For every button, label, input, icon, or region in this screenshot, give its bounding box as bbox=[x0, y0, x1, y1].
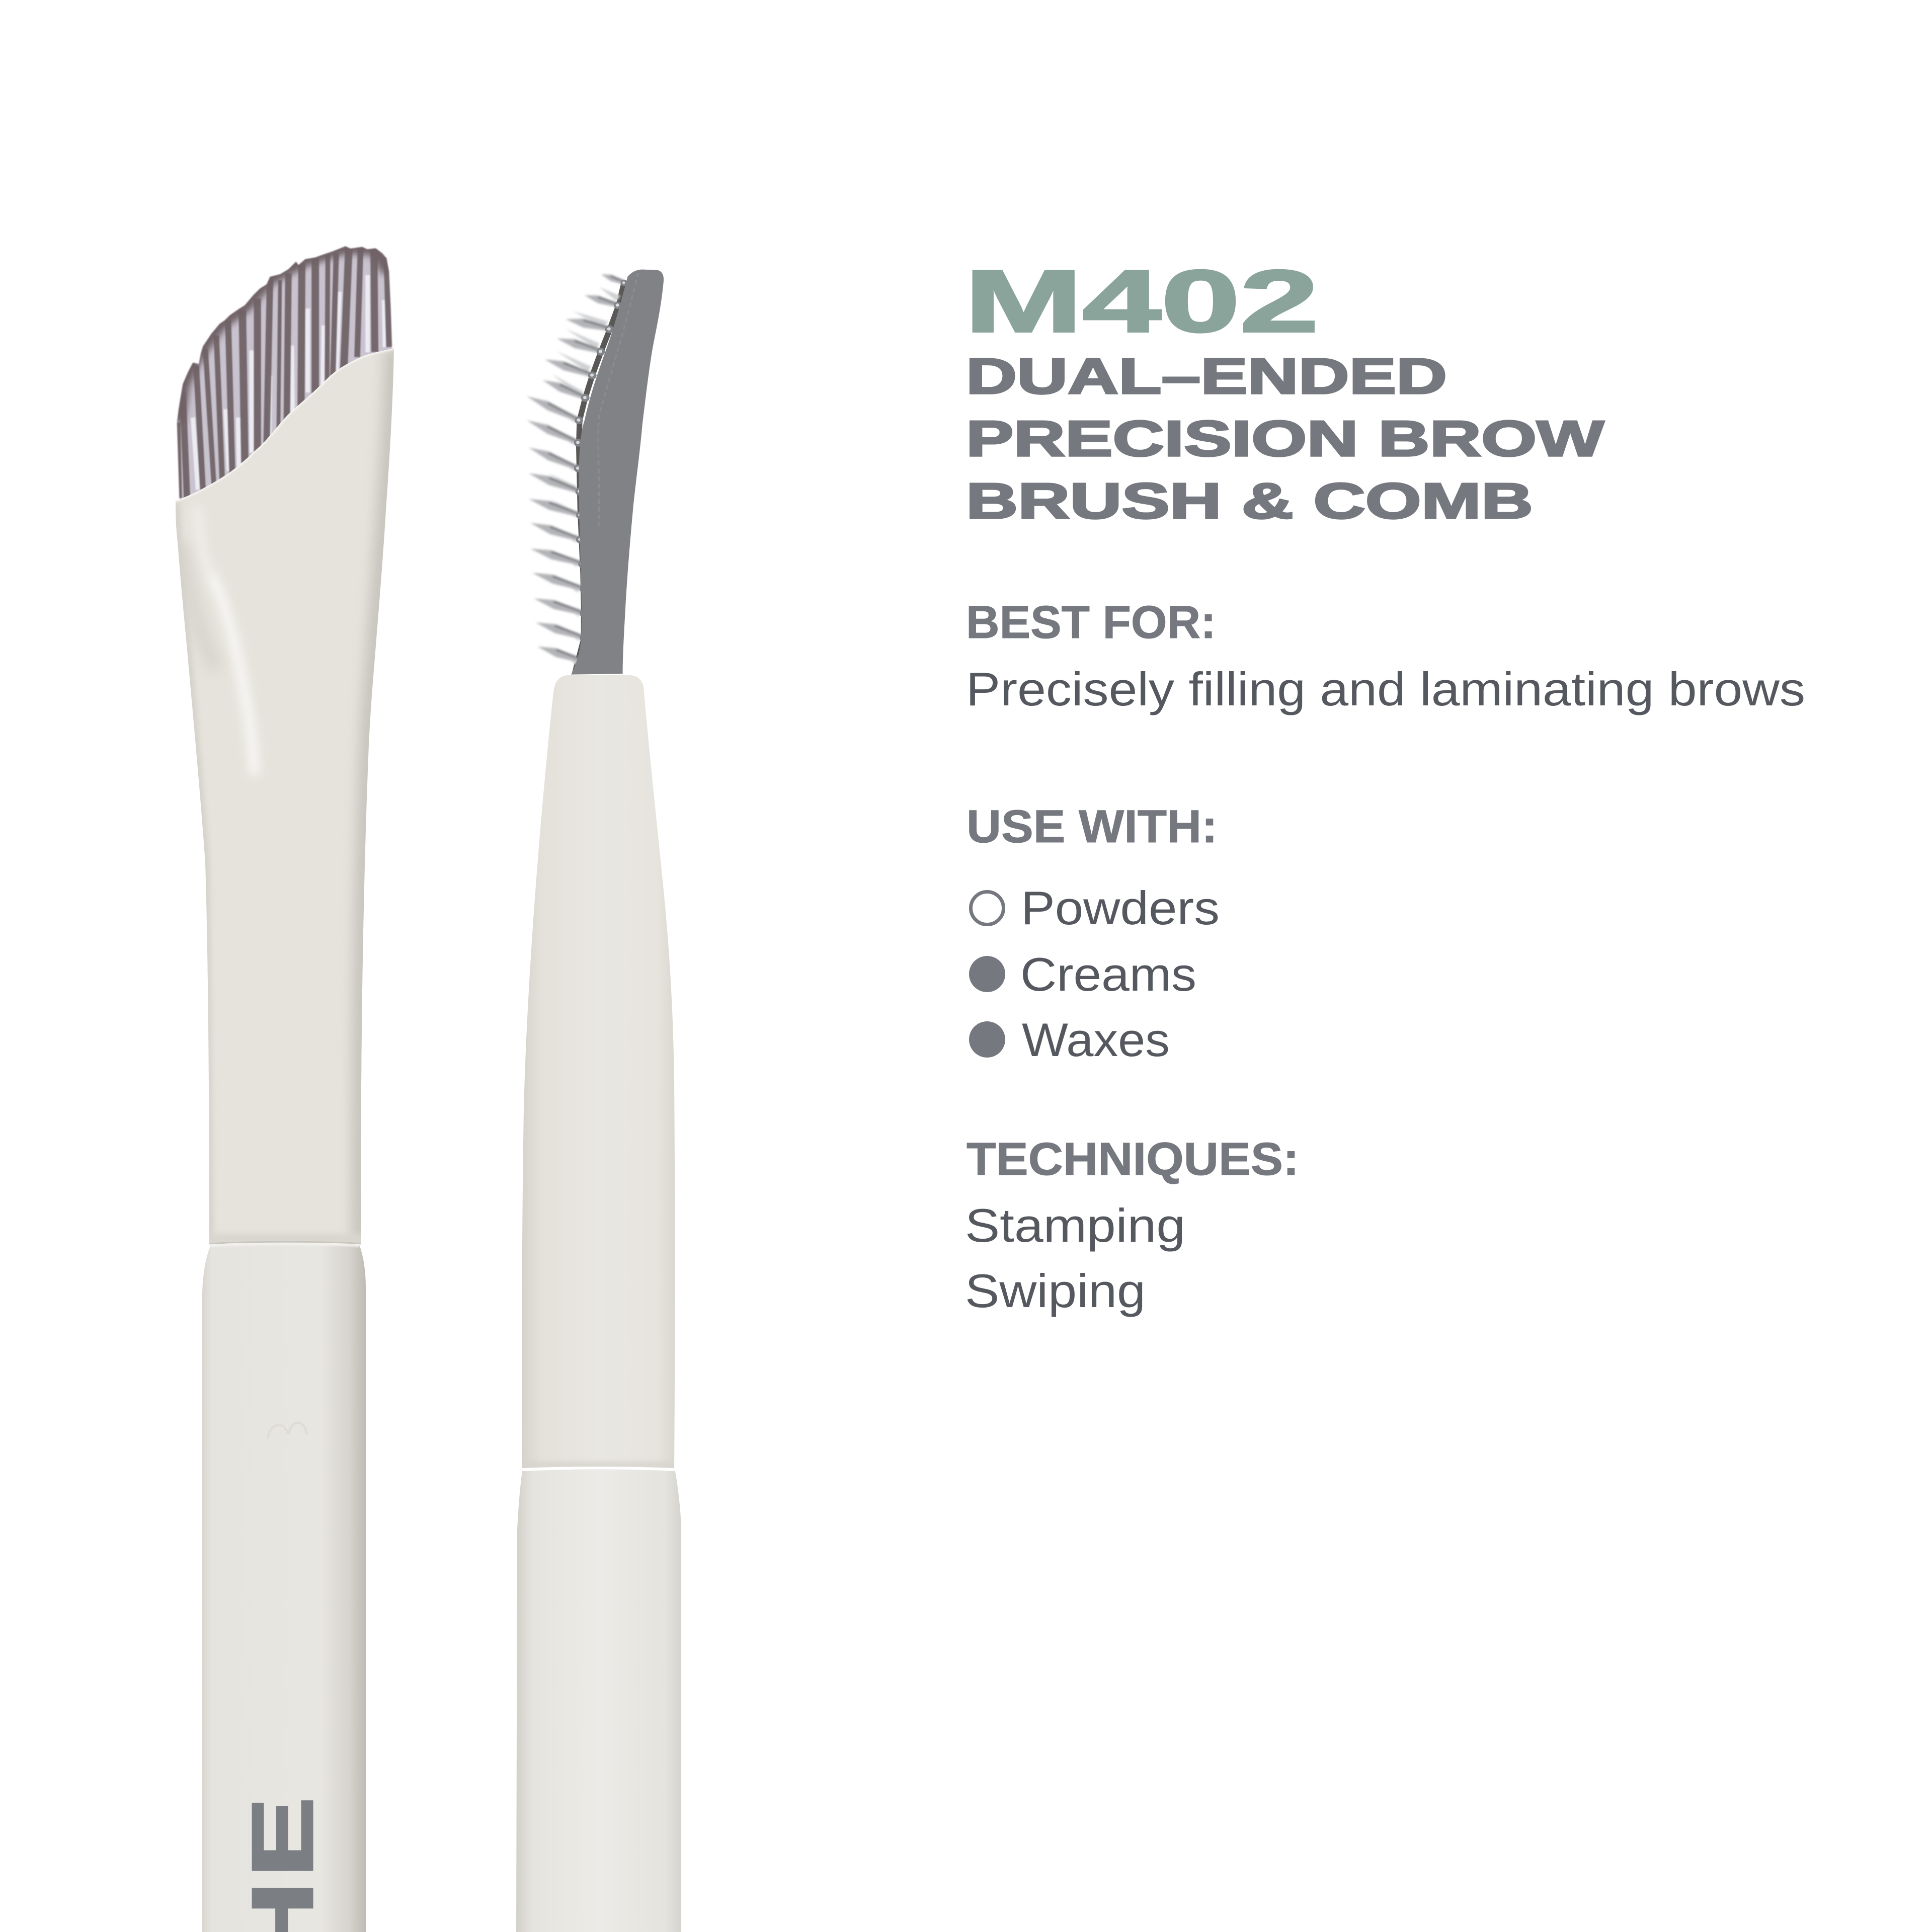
section: use with bbox=[967, 801, 1220, 1066]
section: best for bbox=[966, 597, 1805, 715]
brush: brow comb bbox=[513, 270, 684, 1932]
bristles bbox=[175, 243, 396, 505]
comb spine bbox=[571, 270, 664, 675]
ferrule: comb end bbox=[518, 672, 679, 1472]
section: best for: Precisely filling and laminating brows bbox=[966, 663, 1805, 715]
faint embossed mark bbox=[268, 1423, 307, 1439]
seam: left brush bbox=[209, 1242, 361, 1244]
comb teeth bbox=[527, 270, 664, 675]
label: waxes: Waxes bbox=[1022, 1013, 1170, 1066]
section: techniques: Stamping bbox=[965, 1199, 1185, 1252]
ferrule: angled brush head bbox=[166, 342, 403, 1248]
section: techniques: TECHNIQUES: bbox=[967, 1134, 1299, 1185]
icon: filled circle bbox=[969, 1021, 1005, 1058]
handle: left brush bbox=[199, 1240, 370, 1932]
label: creams: Creams bbox=[1020, 948, 1196, 1001]
section: best for: BEST FOR: bbox=[966, 597, 1216, 648]
product name: BRUSH & COMB bbox=[966, 473, 1533, 529]
icon: empty circle bbox=[971, 892, 1003, 925]
product name bbox=[966, 348, 1604, 529]
heading block bbox=[964, 253, 1604, 529]
section: use with: USE WITH: bbox=[967, 801, 1218, 852]
icon: filled circle bbox=[969, 956, 1005, 992]
label: powders: Powders bbox=[1021, 881, 1220, 934]
product code: M402 bbox=[964, 253, 1319, 351]
product name: PRECISION BROW bbox=[966, 411, 1604, 467]
product name: DUAL–ENDED bbox=[966, 348, 1447, 405]
section: techniques: Swiping bbox=[965, 1264, 1146, 1317]
brush: angled brow brush bbox=[166, 243, 403, 1932]
section: techniques bbox=[965, 1134, 1299, 1317]
handle: comb brush bbox=[513, 1467, 684, 1932]
